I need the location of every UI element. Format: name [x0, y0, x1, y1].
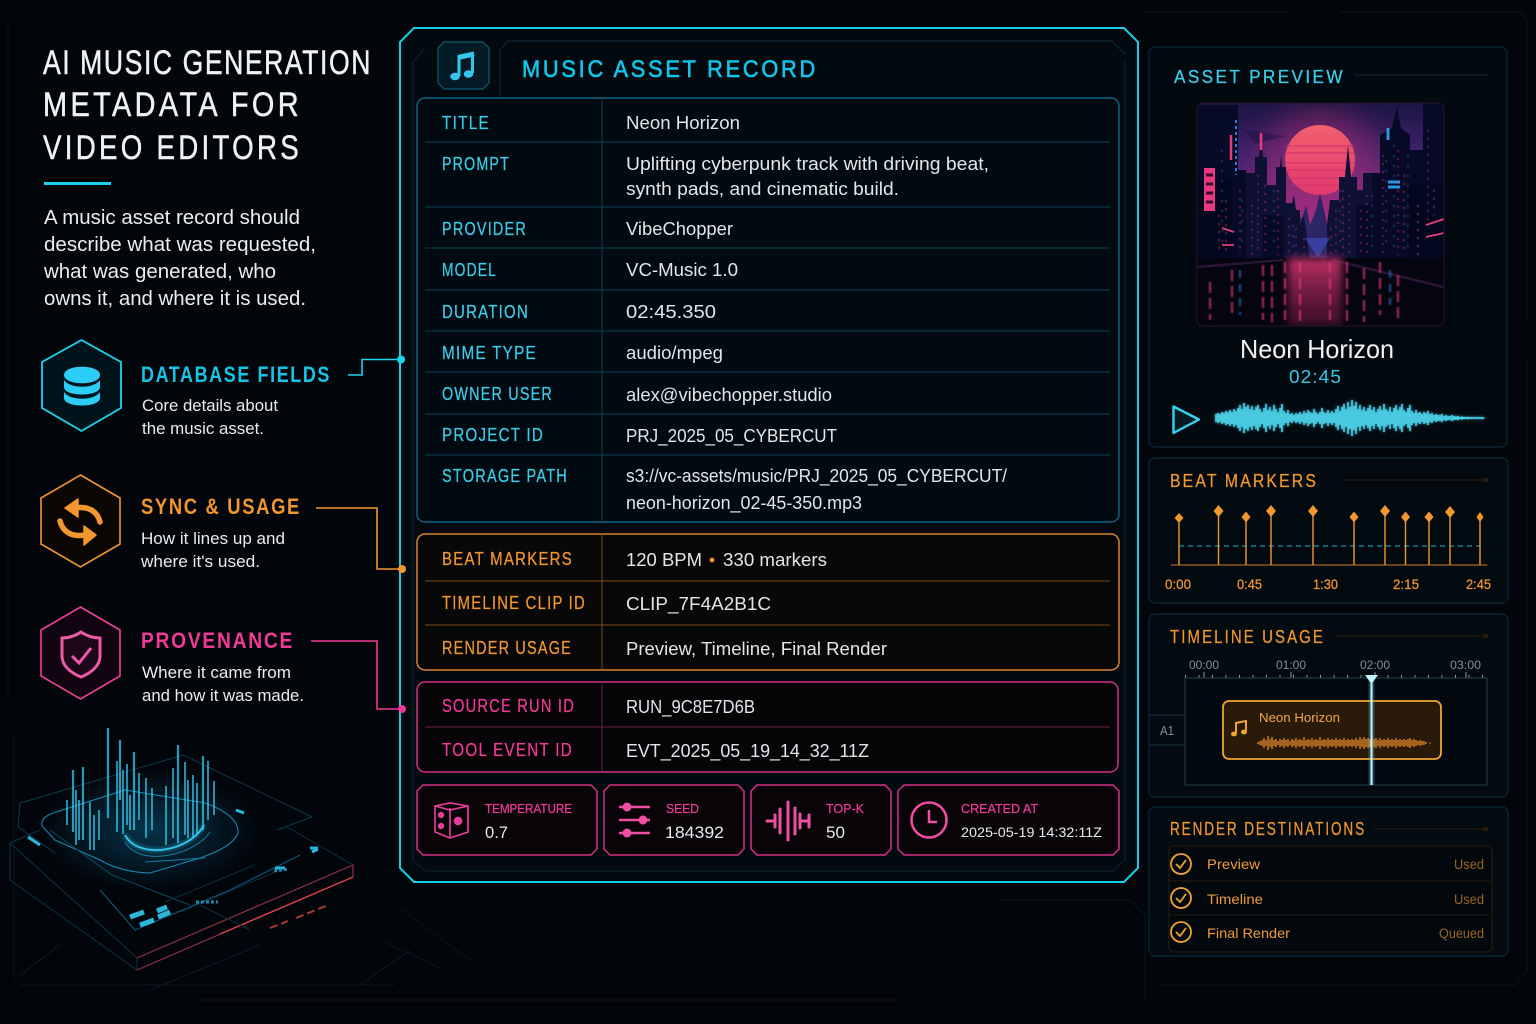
icon: sliders	[619, 804, 650, 836]
track title: Neon Horizon	[1240, 334, 1394, 364]
illustration: holographic music deck	[10, 728, 410, 990]
intro text: A music asset record should	[44, 207, 300, 229]
row: final render: Final Render	[1207, 925, 1290, 941]
legend: provenance: Where it came from	[142, 663, 291, 682]
table: database fields: Uplifting cyberpunk track with driving beat,	[626, 154, 989, 174]
row: final render: Queued	[1439, 925, 1484, 941]
icon: die	[435, 803, 468, 838]
row: preview: Preview	[1207, 856, 1261, 872]
row: timeline: Timeline	[1207, 891, 1263, 907]
card: top-k: TOP-K	[826, 801, 864, 816]
row: preview	[1171, 854, 1484, 874]
table: database fields: PRJ_2025_05_CYBERCUT	[626, 426, 837, 447]
time ruler: 01:00	[1276, 658, 1306, 672]
table: sync and usage: TIMELINE CLIP ID	[442, 593, 586, 613]
panel: beat markers	[1149, 458, 1508, 603]
icon: database	[42, 340, 121, 431]
heading: MUSIC ASSET RECORD	[522, 56, 818, 83]
table: database fields: synth pads, and cinematic build.	[626, 179, 899, 199]
card: top-k	[751, 785, 891, 855]
heading: ASSET PREVIEW	[1174, 67, 1345, 87]
icon: waveform	[767, 802, 809, 840]
track duration: 02:45	[1289, 367, 1342, 387]
legend: sync and usage: SYNC & USAGE	[141, 494, 301, 519]
time ruler: 00:00	[1189, 658, 1219, 672]
table: database fields: OWNER USER	[442, 384, 553, 404]
axis labels: 2:15	[1393, 576, 1419, 592]
time ruler	[1185, 658, 1487, 678]
table: sync and usage: Preview, Timeline, Final Render	[626, 639, 887, 659]
row: preview: Used	[1454, 856, 1484, 872]
panel: timeline usage	[1149, 614, 1508, 797]
heading: TIMELINE USAGE	[1170, 627, 1325, 647]
table: database fields: audio/mpeg	[626, 343, 723, 363]
icon: play	[1174, 406, 1199, 433]
table: provenance: SOURCE RUN ID	[442, 696, 575, 716]
panel: asset preview	[1149, 47, 1507, 447]
table: database fields: neon-horizon_02-45-350.mp3	[626, 493, 862, 514]
waveform: audio preview	[1216, 400, 1484, 436]
table: provenance: RUN_9C8E7D6B	[626, 697, 755, 718]
icon: shield	[41, 607, 120, 699]
table: database fields: STORAGE PATH	[442, 466, 568, 486]
title: METADATA FOR	[43, 86, 302, 124]
table: database fields: alex@vibechopper.studio	[626, 385, 832, 405]
card: created at	[898, 785, 1119, 855]
card: seed: SEED	[666, 801, 699, 816]
card: seed: 184392	[665, 823, 724, 842]
table: database fields: DURATION	[442, 302, 529, 322]
card: created at: CREATED AT	[961, 801, 1038, 816]
row: final render	[1171, 922, 1484, 942]
legend: sync and usage	[41, 475, 301, 571]
connector: sync and usage to table	[316, 508, 406, 573]
table: sync and usage	[417, 534, 1119, 670]
table: database fields: VC-Music 1.0	[626, 260, 738, 280]
legend: provenance: PROVENANCE	[141, 628, 294, 653]
row: timeline: Used	[1454, 891, 1484, 907]
table: database fields: VibeChopper	[626, 219, 733, 239]
legend: provenance: and how it was made.	[142, 686, 304, 705]
time ruler: 03:00	[1450, 658, 1481, 672]
time ruler: 02:00	[1360, 658, 1390, 672]
table: provenance: EVT_2025_05_19_14_32_11Z	[626, 741, 869, 762]
intro text: owns it, and where it is used.	[44, 288, 306, 310]
table: database fields	[417, 98, 1119, 522]
table: sync and usage: CLIP_7F4A2B1C	[626, 594, 771, 615]
panel: render destinations	[1149, 807, 1508, 956]
legend: database fields: DATABASE FIELDS	[141, 362, 331, 387]
heading: BEAT MARKERS	[1170, 471, 1318, 491]
table: database fields: PROVIDER	[442, 219, 527, 239]
legend: database fields	[42, 340, 331, 438]
axis labels: 1:30	[1313, 576, 1338, 592]
icon: music note	[438, 42, 489, 89]
card: temperature	[417, 785, 597, 855]
card: top-k: 50	[826, 823, 845, 842]
table: sync and usage: RENDER USAGE	[442, 638, 572, 658]
intro text: describe what was requested,	[44, 234, 316, 256]
audio clip	[1223, 701, 1441, 759]
title: AI MUSIC GENERATION	[43, 44, 372, 82]
audio clip: Neon Horizon	[1259, 710, 1340, 725]
table: database fields: PROMPT	[442, 154, 510, 174]
axis labels: 2:45	[1466, 576, 1491, 592]
table: provenance: TOOL EVENT ID	[442, 740, 573, 760]
track label A1: A1	[1160, 723, 1174, 738]
title	[43, 44, 372, 167]
track label A1	[1150, 715, 1185, 745]
table: sync and usage: BEAT MARKERS	[442, 549, 573, 569]
legend: database fields: the music asset.	[142, 419, 264, 438]
icon: clip note	[1231, 721, 1247, 736]
connector: provenance to table	[311, 641, 406, 713]
legend: sync and usage: where it's used.	[140, 552, 260, 571]
title: VIDEO EDITORS	[43, 129, 302, 167]
table: database fields: 02:45.350	[626, 302, 716, 322]
table: sync and usage: 120 BPM	[626, 550, 702, 570]
heading: RENDER DESTINATIONS	[1170, 819, 1366, 839]
panel: music asset record	[400, 28, 1138, 882]
connector: database fields to table	[348, 356, 405, 375]
table: database fields: PROJECT ID	[442, 425, 544, 445]
table: database fields: MODEL	[442, 260, 497, 280]
playhead	[1365, 675, 1378, 785]
table: database fields: TITLE	[442, 113, 490, 133]
axis labels: 0:00	[1165, 576, 1191, 592]
table: sync and usage: 330 markers	[723, 550, 827, 570]
icon: sync arrows	[41, 475, 120, 567]
chart: beat stems	[1165, 505, 1491, 592]
axis labels	[1165, 576, 1491, 592]
legend: sync and usage: How it lines up and	[141, 529, 285, 548]
table: database fields: Neon Horizon	[626, 113, 740, 133]
legend: provenance	[41, 607, 304, 705]
card: temperature: TEMPERATURE	[485, 801, 572, 816]
legend: database fields: Core details about	[142, 396, 278, 415]
intro text: what was generated, who	[43, 261, 276, 283]
icon: clock	[912, 802, 946, 838]
cover art: neon city	[1197, 103, 1444, 326]
row: timeline	[1171, 888, 1484, 908]
card: seed	[604, 785, 744, 855]
card: created at: 2025-05-19 14:32:11Z	[961, 824, 1102, 840]
card: temperature: 0.7	[485, 823, 508, 842]
table: database fields: s3://vc-assets/music/PRJ_2025_05_CYBERCUT/	[626, 466, 1007, 487]
intro text	[43, 207, 316, 310]
table: database fields: MIME TYPE	[442, 343, 537, 363]
axis labels: 0:45	[1237, 576, 1262, 592]
table: provenance	[417, 682, 1118, 772]
